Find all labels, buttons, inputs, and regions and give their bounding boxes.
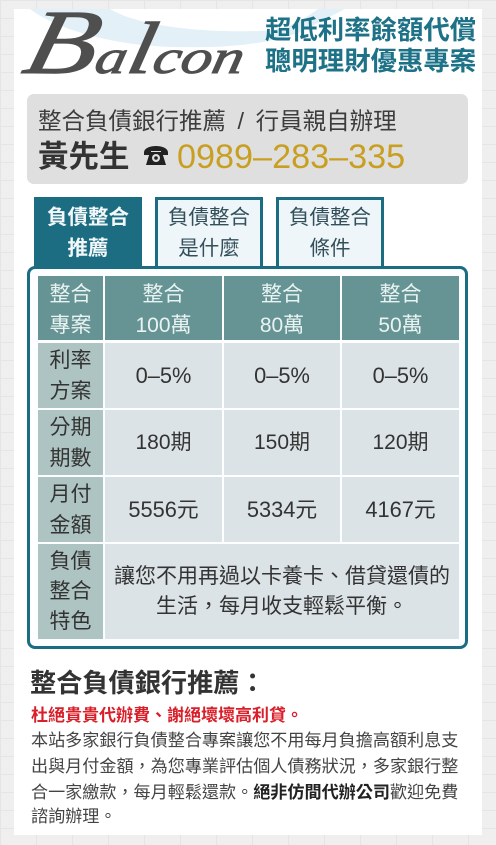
row: monthly payment bbox=[38, 477, 459, 542]
row: monthly payment: 月付 bbox=[50, 482, 92, 506]
row: features: 讓您不用再過以卡養卡、借貸還債的 bbox=[114, 564, 450, 588]
header row: 100萬 bbox=[135, 314, 192, 337]
row: features: 整合 bbox=[50, 580, 92, 602]
red warning line: 杜絕貴貴代辦費、謝絕壞壞高利貸。 bbox=[31, 706, 303, 725]
contact subtitle: 整合負債銀行推薦 / 行員親自辦理 bbox=[38, 108, 397, 134]
panel: contact box bbox=[27, 94, 468, 184]
row: instalments: 分期 bbox=[50, 416, 92, 438]
row: interest rate: 0–5% bbox=[254, 363, 310, 388]
header row: 整合 bbox=[261, 283, 303, 306]
row: features: 特色 bbox=[50, 610, 92, 632]
tab: what is it: 是什麼 bbox=[178, 237, 240, 260]
row: instalments: 120期 bbox=[372, 431, 429, 454]
row: monthly payment: 金額 bbox=[50, 514, 92, 536]
row: features bbox=[38, 544, 459, 639]
header slogan: 超低利率餘額代償 bbox=[265, 15, 476, 45]
row: monthly payment: 5556元 bbox=[128, 497, 199, 522]
row: instalments: 150期 bbox=[254, 431, 310, 454]
header row bbox=[38, 276, 459, 340]
header row: 80萬 bbox=[260, 314, 304, 337]
header row: 整合 bbox=[142, 283, 184, 306]
tab: active recommendation bbox=[34, 197, 142, 267]
row: instalments: 180期 bbox=[135, 431, 192, 454]
header row: 整合 bbox=[50, 283, 92, 306]
row: interest rate: 利率 bbox=[50, 348, 92, 372]
section heading: 整合負債銀行推薦： bbox=[30, 668, 266, 698]
contact phone number: 0989–283–335 bbox=[177, 138, 405, 176]
header slogan bbox=[265, 15, 476, 76]
row: instalments: 期數 bbox=[50, 446, 92, 470]
row: interest rate: 方案 bbox=[50, 380, 92, 402]
row: instalments bbox=[38, 410, 459, 475]
row: features: 負債 bbox=[50, 550, 92, 572]
header logo with swoosh: alcon bbox=[90, 9, 255, 89]
tab: active recommendation: 負債整合 bbox=[47, 206, 129, 229]
tab: conditions: 負債整合 bbox=[289, 206, 371, 229]
tab: what is it bbox=[155, 197, 263, 267]
row: features: 生活，每月收支輕鬆平衡。 bbox=[156, 594, 408, 618]
row: interest rate: 0–5% bbox=[136, 363, 191, 388]
contact name: 黃先生 bbox=[38, 140, 130, 174]
header logo with swoosh bbox=[15, 9, 344, 89]
body paragraph: 本站多家銀行負債整合專案讓您不用每月負擔高額利息支 bbox=[31, 731, 458, 750]
header slogan: 聰明理財優惠專案 bbox=[265, 46, 476, 76]
header row: 專案 bbox=[50, 314, 92, 337]
body paragraph: 出與月付金額，為您專業評估個人債務狀況，多家銀行整 bbox=[31, 757, 458, 776]
tab: active recommendation: 推薦 bbox=[68, 237, 108, 260]
tab: what is it: 負債整合 bbox=[168, 206, 250, 229]
row: interest rate bbox=[38, 343, 459, 408]
header row: 50萬 bbox=[378, 314, 423, 337]
body paragraph: 合一家繳款，每月輕鬆還款。絕非仿間代辦公司歡迎免費 bbox=[31, 783, 458, 802]
tab: conditions bbox=[276, 197, 384, 267]
header row: 整合 bbox=[379, 283, 421, 306]
row: interest rate: 0–5% bbox=[373, 363, 428, 388]
tab: conditions: 條件 bbox=[310, 237, 350, 260]
row: monthly payment: 5334元 bbox=[247, 497, 317, 522]
body paragraph: 諮詢辦理。 bbox=[31, 807, 116, 826]
row: monthly payment: 4167元 bbox=[365, 497, 436, 522]
icon: telephone bbox=[144, 146, 168, 165]
body paragraph bbox=[31, 731, 458, 826]
panel: table frame bbox=[27, 266, 468, 649]
